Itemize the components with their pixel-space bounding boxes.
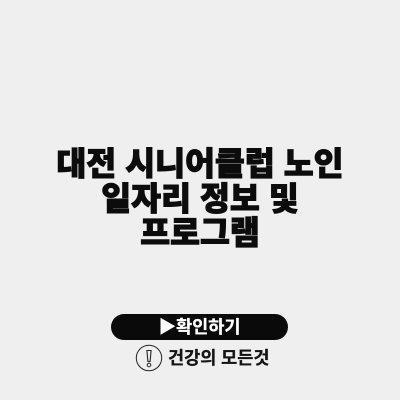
button: 확인하기: ▶확인하기 <box>159 317 240 337</box>
button: 확인하기 <box>111 314 288 340</box>
title: 대전 시니어클럽 노인 <box>56 146 344 182</box>
title: 일자리 정보 및 <box>101 180 299 216</box>
caption: 건강의 모든것: 건강의 모든것 <box>168 348 269 368</box>
title: 프로그램 <box>140 215 260 251</box>
title <box>56 146 344 251</box>
icon: exclamation in circle <box>136 344 162 372</box>
